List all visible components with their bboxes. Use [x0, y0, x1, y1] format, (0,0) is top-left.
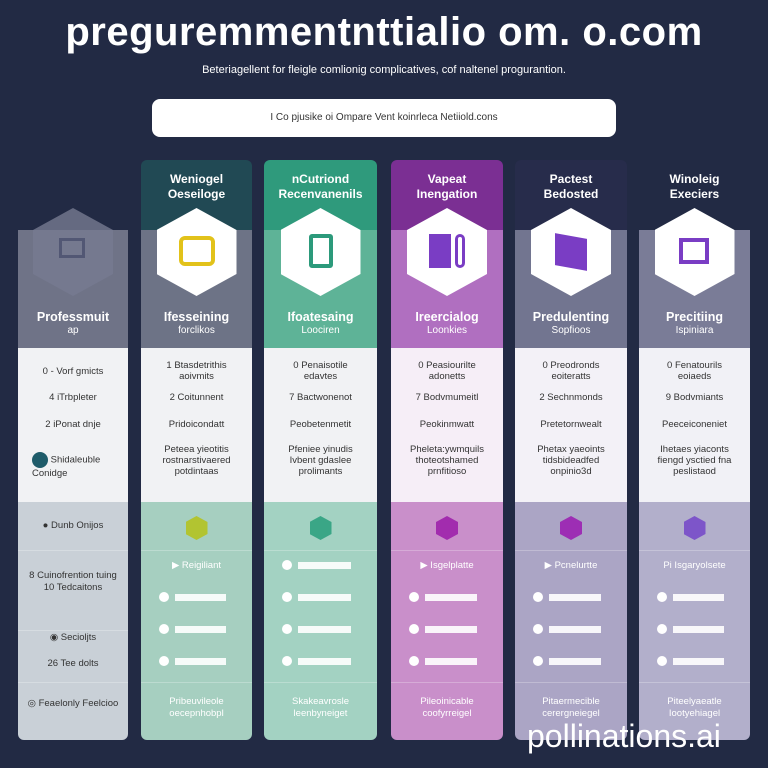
panel: column 4: Pactest: [550, 172, 592, 186]
panel: column 2: edavtes: [304, 371, 337, 382]
panel: column 1: potdintaas: [175, 466, 218, 477]
panel: column 2: 0 Penaisotile: [293, 360, 348, 371]
panel: column 1: Weniogel: [170, 172, 223, 186]
panel: column 3: Pheleta:ywmquils: [410, 444, 484, 455]
panel: column 3: Inengation: [417, 187, 477, 201]
panel: column 3: [391, 160, 503, 740]
panel: column 1: oecepnhobpl: [169, 708, 224, 719]
panel: column 3: prnfitioso: [428, 466, 466, 477]
panel: column 5: Ispiniara: [676, 325, 713, 336]
panel: column 4: Predulenting: [533, 310, 609, 324]
panel: column 2: prolimants: [299, 466, 342, 477]
panel: column 2: 7 Bactwonenot: [289, 392, 352, 403]
panel: column 4: [515, 172, 627, 740]
panel: column 4: Pitaermecible: [542, 696, 600, 707]
panel: column 3: Loonkies: [427, 325, 467, 336]
panel: column 2: Peobetenmetit: [290, 419, 351, 430]
panel: column 5: Precitiing: [666, 310, 723, 324]
panel: column 4: cerergneiegel: [542, 708, 600, 719]
panel: column 4: tidsbideadfed: [543, 455, 599, 466]
panel: column 0: ◎ Feaelonly Feelcioo: [28, 698, 118, 709]
icon: purple book: [531, 208, 611, 296]
panel: column 4: ▶ Pcnelurtte: [545, 560, 597, 571]
panel: column 5: Winoleig: [670, 172, 719, 186]
panel: column 3: coofyrreigel: [422, 708, 472, 719]
panel: column 5: Peeceiconeniet: [662, 419, 727, 430]
panel: column 1: Pridoicondatt: [169, 419, 224, 430]
panel: column 3: Ireercialog: [415, 310, 479, 324]
panel: column 2: [264, 160, 377, 740]
panel: column 4: Sopfioos: [552, 325, 590, 336]
panel: column 5: 9 Bodvmiants: [666, 392, 723, 403]
icon: document: [280, 208, 360, 296]
panel: column 1: 1 Btasdetrithis: [166, 360, 227, 371]
search bar: I Co pjusike oi Ompare Vent koinrleca Netiiold.cons: [270, 112, 498, 123]
panel: column 5: Pi Isgaryolsete: [663, 560, 726, 571]
panel: column 2: leenbyneiget: [294, 708, 347, 719]
panel: column 1: rostnarstivaered: [162, 455, 231, 466]
panel: column 0: [18, 208, 128, 740]
panel: column 2: Recenvanenils: [278, 187, 363, 201]
panel: column 0: ap: [67, 325, 79, 336]
panel: column 0: 0 - Vorf gmicts: [43, 366, 103, 377]
panel: column 2: Loociren: [301, 325, 340, 336]
icon: yellow network: [156, 208, 236, 296]
watermark: pollinations.ai: [527, 718, 721, 754]
panel: column 0: 4 iTrbpleter: [49, 392, 97, 403]
panel: column 4: Phetax yaeoints: [537, 444, 605, 455]
panel: column 5: Ihetaes yiaconts: [660, 444, 729, 455]
panel: column 4: eoiteratts: [551, 371, 591, 382]
panel: column 3: 7 Bodvmumeitl: [416, 392, 478, 403]
panel: column 4: Pretetornwealt: [540, 419, 602, 430]
panel: column 1: aoivmits: [179, 371, 214, 382]
panel: column 3: Vapeat: [428, 172, 466, 186]
subtitle: Beteriagellent for fleigle comlionig complicatives, cof naltenel progurantion.: [202, 64, 566, 76]
panel: column 4: 2 Sechnmonds: [539, 392, 603, 403]
panel: column 3: 0 Peasiourilte: [418, 360, 476, 371]
panel: column 1: forclikos: [178, 325, 215, 336]
panel: column 1: Peteea yieotitis: [164, 444, 229, 455]
panel: column 3: Pileoinicable: [420, 696, 474, 707]
panel: column 5: [639, 172, 750, 740]
icon: purple tools: [407, 208, 487, 296]
panel: column 0: 10 Tedcaitons: [44, 582, 102, 593]
panel: column 0: 2 iPonat dnje: [45, 419, 101, 430]
panel: column 3: adonetts: [429, 371, 465, 382]
panel: column 5: Iootyehiagel: [669, 708, 720, 719]
panel: column 0: ◉ Secioljts: [50, 632, 96, 643]
icon: frame: [654, 208, 734, 296]
panel: column 0: ● Dunb Onijos: [43, 520, 103, 531]
search bar: [152, 99, 616, 137]
icon: cart: [33, 208, 113, 258]
panel: column 1: Ifesseining: [164, 310, 229, 324]
panel: column 5: 0 Fenatourils: [667, 360, 722, 371]
panel: column 5: Execiers: [670, 187, 719, 201]
panel: column 1: Pribeuvileole: [169, 696, 224, 707]
panel: column 2: Pfeniee yinudis: [288, 444, 353, 455]
panel: column 2: nCutriond: [292, 172, 349, 186]
panel: column 3: thoteotshamed: [416, 455, 478, 466]
panel: column 2: Ifoatesaing: [288, 310, 354, 324]
panel: column 4: onpinio3d: [550, 466, 592, 477]
panel: column 3: Peokinmwatt: [420, 419, 474, 430]
panel: column 5: fiengd ysctied fna: [658, 455, 731, 466]
panel: column 5: peslistaod: [673, 466, 716, 477]
panel: column 0: 26 Tee dolts: [47, 658, 99, 669]
panel: column 1: Oeseiloge: [168, 187, 225, 201]
panel: column 4: 0 Preodronds: [542, 360, 600, 371]
panel: column 3: ▶ Isgelplatte: [420, 560, 474, 571]
panel: column 2: Ivbent gdaslee: [290, 455, 351, 466]
panel: column 5: Piteelyaeatle: [667, 696, 722, 707]
panel: column 0: Shidaleuble Conidge: [32, 455, 100, 479]
panel: column 5: eoiaeds: [678, 371, 711, 382]
panel: column 0: 8 Cuinofrention tuing: [29, 570, 117, 581]
panel: column 2: Skakeavrosle: [292, 696, 349, 707]
panel: column 1: [141, 160, 252, 740]
panel: column 1: ▶ Reigiliant: [172, 560, 221, 571]
panel: column 4: Bedosted: [544, 187, 598, 201]
title: preguremmentnttialio om. o.com: [65, 10, 703, 54]
panel: column 1: 2 Coitunnent: [170, 392, 223, 403]
panel: column 0: Professmuit: [37, 310, 109, 324]
